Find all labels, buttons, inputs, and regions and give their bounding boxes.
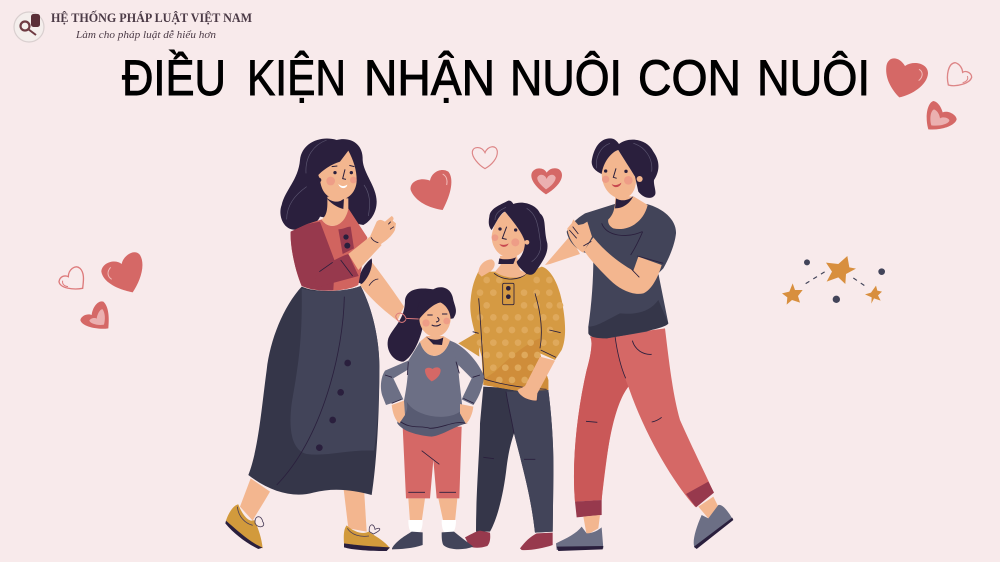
mother skirt <box>248 286 379 495</box>
father head <box>602 150 636 198</box>
girl shorts <box>403 427 462 498</box>
teen sweater dots <box>477 277 563 383</box>
father ankles <box>583 497 718 535</box>
father trousers <box>574 328 713 507</box>
father shoes <box>556 505 732 550</box>
mother back arm <box>360 261 404 321</box>
girl hair ribbon <box>396 313 419 322</box>
illustration: father <box>545 138 733 551</box>
title: KIỆN <box>247 50 346 106</box>
teen head <box>492 212 527 257</box>
illustration: teen daughter <box>458 201 565 550</box>
mother hair <box>280 139 377 230</box>
teen hair <box>489 201 548 275</box>
logo <box>14 12 44 42</box>
illustration: little girl <box>381 287 484 549</box>
father hair <box>592 138 658 198</box>
father cuffs <box>575 482 714 517</box>
father neck <box>608 195 648 229</box>
teen arm <box>517 357 555 401</box>
teen sweater <box>458 332 479 357</box>
mother sleeve and front arm <box>315 254 359 287</box>
title: ĐIỀU <box>122 50 226 106</box>
mother shoes <box>226 504 263 548</box>
girl shoes <box>392 532 473 549</box>
title <box>122 50 870 106</box>
father t-shirt <box>567 203 676 338</box>
teen shoes <box>465 531 553 550</box>
father front arm <box>584 237 662 294</box>
teen neck <box>495 255 527 278</box>
girl hair back <box>388 287 456 362</box>
stars constellation <box>782 256 885 305</box>
title: NUÔI <box>757 50 870 106</box>
girl shirt <box>400 340 463 420</box>
teen trousers <box>476 387 553 533</box>
girl bangs <box>418 288 451 320</box>
mother head <box>318 151 357 200</box>
father far arm <box>545 236 580 265</box>
title: NHẬN <box>364 50 495 106</box>
girl socks <box>408 520 456 534</box>
girl face <box>419 302 451 337</box>
girl hands <box>392 401 473 424</box>
illustration: mother <box>225 139 404 551</box>
girl legs <box>408 498 457 522</box>
girl neck <box>420 336 450 356</box>
hearts: top right <box>886 58 972 130</box>
mother legs <box>240 478 270 521</box>
mother neck and chest <box>322 197 348 226</box>
title: CON <box>638 50 741 106</box>
hearts: left <box>59 252 142 329</box>
hearts: center <box>411 147 562 210</box>
father hand on teen shoulder <box>478 259 495 277</box>
mother blouse <box>291 208 367 291</box>
site name: HỆ THỐNG PHÁP LUẬT VIỆT NAM <box>51 10 252 25</box>
tagline: Làm cho pháp luật dễ hiểu hơn <box>75 30 216 41</box>
title: NUÔI <box>510 50 622 106</box>
